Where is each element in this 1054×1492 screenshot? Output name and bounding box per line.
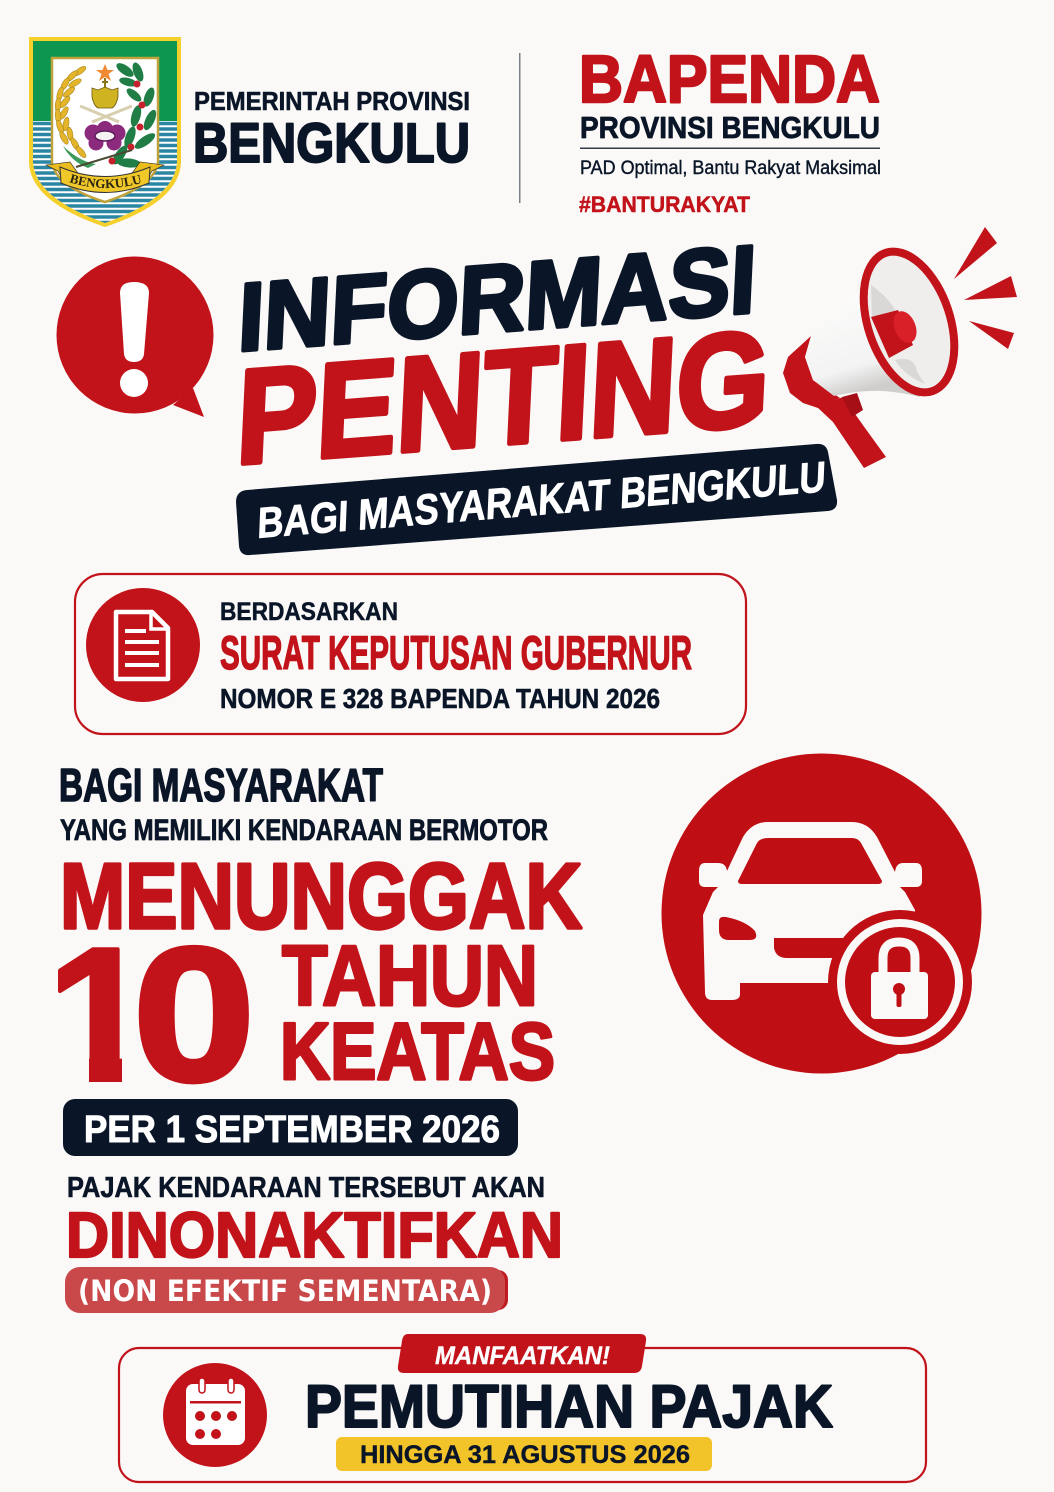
padlock badge bbox=[828, 910, 972, 1054]
megaphone mouth bbox=[847, 240, 971, 404]
title line: Informasi: INFORMASI bbox=[236, 226, 759, 372]
text: Surat Keputusan Gubernur: SURAT KEPUTUSAN GUBERNUR bbox=[220, 626, 692, 679]
car headlight and grille bbox=[719, 917, 860, 958]
date pill: per 1 September 2026: PER 1 SEPTEMBER 2026 bbox=[84, 1109, 500, 1151]
icon: document bbox=[86, 588, 200, 702]
icon: locked car bbox=[662, 754, 982, 1074]
title line: Penting: PENTING bbox=[234, 302, 773, 493]
icon: calendar bbox=[163, 1363, 267, 1467]
icon: sound rays bbox=[954, 227, 1017, 349]
text: Provinsi Bengkulu: PROVINSI BENGKULU bbox=[580, 110, 880, 145]
text: Berdasarkan: BERDASARKAN bbox=[220, 598, 398, 626]
megaphone handle bbox=[817, 397, 886, 468]
icon: Bengkulu coat of arms shield bbox=[29, 37, 181, 227]
car windshield bbox=[738, 838, 882, 884]
text: number 10: 0 bbox=[133, 909, 255, 1121]
badge: Manfaatkan bbox=[398, 1334, 646, 1373]
text: Pemutihan Pajak: PEMUTIHAN PAJAK bbox=[305, 1373, 833, 1440]
badge: Manfaatkan: MANFAATKAN! bbox=[435, 1342, 610, 1370]
banner: Bagi Masyarakat Bengkulu: BAGI MASYARAKAT BENGKULU bbox=[257, 453, 827, 548]
text: number 10: 1 bbox=[47, 909, 153, 1121]
text: Menunggak: MENUNGGAK bbox=[60, 844, 582, 948]
date pill: per 1 September 2026 bbox=[63, 1099, 518, 1156]
text: Bagi Masyarakat: BAGI MASYARAKAT bbox=[59, 759, 383, 811]
text: vehicle owners: YANG MEMILIKI KENDARAAN BERMOTOR bbox=[60, 814, 548, 847]
title: Informasi Penting bbox=[234, 226, 773, 493]
pill: non efektif sementara bbox=[65, 1267, 508, 1313]
text: Pemerintah Provinsi: PEMERINTAH PROVINSI bbox=[194, 88, 470, 116]
text: slogan: PAD Optimal, Bantu Rakyat Maksimal bbox=[580, 158, 881, 179]
text: Dinonaktifkan: DINONAKTIFKAN bbox=[66, 1199, 563, 1271]
megaphone driver bbox=[871, 310, 913, 358]
header: government identity bbox=[29, 37, 470, 227]
text: number 10 bbox=[40, 909, 255, 1121]
text: Tahun: TAHUN bbox=[282, 929, 538, 1024]
pill: non efektif sementara: (NON EFEKTIF SEMENTARA) bbox=[78, 1274, 492, 1308]
text: Bapenda: BAPENDA bbox=[579, 42, 880, 117]
icon: exclamation speech bubble bbox=[56, 256, 214, 417]
text: Keatas: KEATAS bbox=[280, 1007, 555, 1097]
deadline pill: HINGGA 31 AGUSTUS 2026 bbox=[360, 1441, 690, 1469]
text: consequence lead-in: PAJAK KENDARAAN TERSEBUT AKAN bbox=[67, 1172, 545, 1204]
header divider bbox=[519, 53, 520, 203]
text block: vehicle tax notice bbox=[40, 759, 582, 1121]
megaphone body bbox=[805, 280, 920, 397]
text: decree number: NOMOR E 328 BAPENDA TAHUN 2026 bbox=[220, 683, 660, 714]
panel: decree reference bbox=[75, 574, 746, 734]
panel: tax amnesty bbox=[119, 1334, 926, 1482]
text: Bengkulu: BENGKULU bbox=[193, 111, 470, 174]
megaphone back collar bbox=[783, 336, 840, 408]
icon: megaphone bbox=[783, 240, 971, 468]
text: hashtag: #BANTURAKYAT bbox=[579, 192, 750, 217]
shield ribbon label: BENGKULU bbox=[69, 174, 140, 188]
car body bbox=[699, 822, 922, 1000]
header: Bapenda identity bbox=[579, 42, 881, 217]
